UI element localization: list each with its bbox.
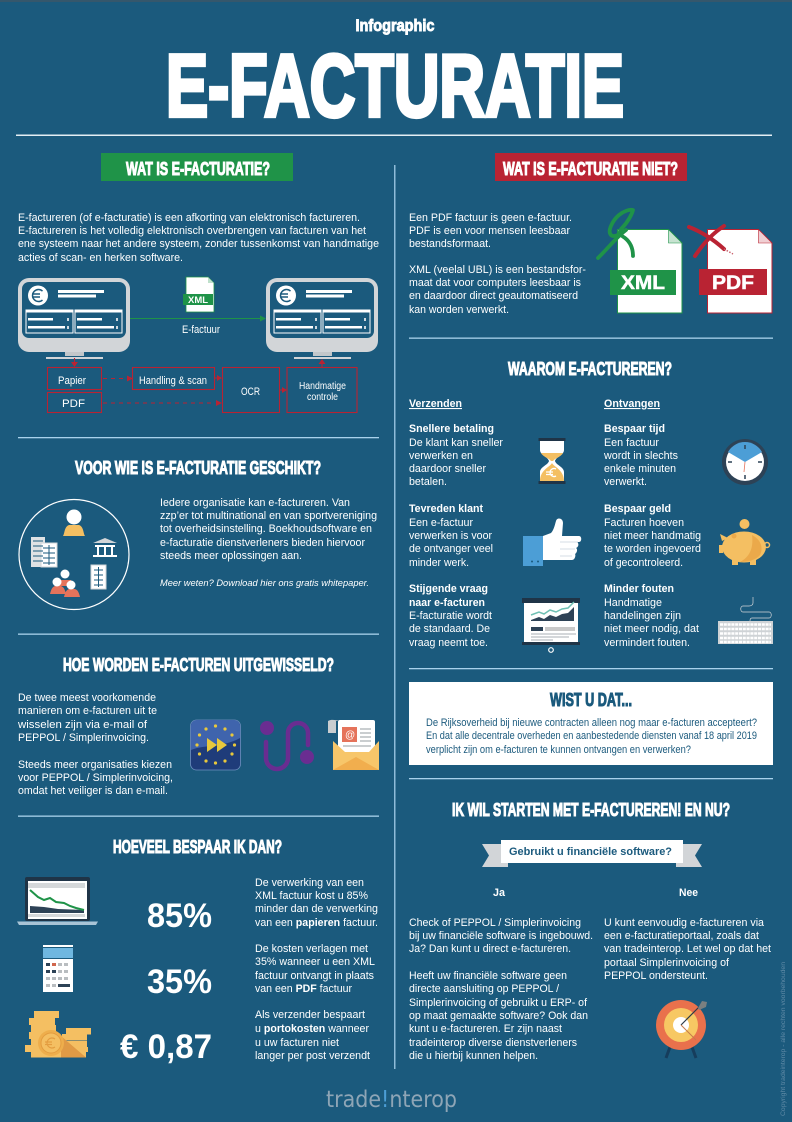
column: ontvangen: Minder fouten xyxy=(604,583,674,595)
text block: 35 percent: De kosten verlagen met xyxy=(255,943,368,955)
stat: 0,87 euro: € 0,87 xyxy=(120,1028,212,1066)
text block: 85 percent xyxy=(255,877,378,929)
title: Infographic xyxy=(356,17,434,35)
text block: voor iedereen: zzp’er tot multinational en van sportvereniging xyxy=(160,510,377,522)
panel: voor wie xyxy=(19,458,377,610)
column: ja: directe aansluiting op PEPPOL / xyxy=(409,983,560,995)
icon: xml document approved xyxy=(598,210,682,313)
column: verzenden: De klant kan sneller xyxy=(409,437,503,449)
column: verzenden: verwerken en xyxy=(409,450,473,462)
title: E-FACTURATIE xyxy=(166,36,624,135)
panel: ik wil starten xyxy=(409,800,771,1062)
text block: 85 percent: minder dan de verwerking xyxy=(255,903,378,915)
icon: piggy bank xyxy=(719,519,770,565)
column: nee xyxy=(604,887,771,982)
title xyxy=(166,17,624,135)
text block: 35 percent: factuur ontvangt in plaats xyxy=(255,970,374,982)
heading: voor wie: VOOR WIE IS E-FACTURATIE GESCHIKT? xyxy=(75,458,321,478)
icon: sender monitor xyxy=(18,278,130,359)
text block: pdf and xml: PDF is een voor mensen leesbaar xyxy=(409,225,570,237)
text block: manieren: voor PEPPOL / Simplerinvoicing, xyxy=(18,772,173,784)
column: verzenden xyxy=(409,398,503,649)
panel: wist u dat: WIST U DAT... xyxy=(550,690,632,710)
text block: pdf and xml: kan worden verwerkt. xyxy=(409,304,509,316)
panel: wist u dat xyxy=(409,682,773,765)
text block: definition: E-factureren (of e-facturatie) is een afkorting van elektronisch factureren. xyxy=(18,212,360,224)
text block: voor iedereen: Iedere organisatie kan e-factureren. Van xyxy=(160,497,350,509)
icon: peppol xyxy=(190,720,240,770)
column: nee: PEPPOL ondersteunt. xyxy=(604,970,708,982)
column: verzenden: E-facturatie wordt xyxy=(409,610,492,622)
column: ontvangen: verwerkt. xyxy=(604,476,647,488)
text block: 35 percent xyxy=(255,943,375,995)
heading: wat is e-facturatie: WAT IS E-FACTURATIE? xyxy=(126,159,270,179)
column: ja xyxy=(409,887,593,1062)
column: ja: kunt u e-factureren. Er zijn naast xyxy=(409,1023,562,1035)
column: ontvangen: te worden ingevoerd xyxy=(604,543,701,555)
icon: target xyxy=(656,1000,707,1058)
text block: pdf and xml: Een PDF factuur is geen e-factuur. xyxy=(409,212,572,224)
icon: calculator xyxy=(43,945,73,992)
column: verzenden: Een e-factuur xyxy=(409,517,473,529)
text block: manieren: omdat het veiliger is dan e-mail. xyxy=(18,785,168,797)
column: ja: op maat gemaakte software? Ook dan xyxy=(409,1010,588,1022)
text block: definition xyxy=(18,212,379,264)
text block: pdf and xml xyxy=(409,212,586,316)
text block: porto: u uw facturen niet xyxy=(255,1037,339,1049)
column: verzenden: naar e-facturen xyxy=(409,597,485,609)
text block: 85 percent: De verwerking van een xyxy=(255,877,364,889)
column: verzenden: daardoor sneller xyxy=(409,463,486,475)
column: ja: die u hierbij kunnen helpen. xyxy=(409,1050,538,1062)
column: verzenden: Verzenden xyxy=(409,398,462,410)
stat: 85 percent: 85% xyxy=(147,897,212,935)
text block: definition: acties of scan- en herken software. xyxy=(18,252,183,264)
column: ja: Heeft uw financiële software geen xyxy=(409,970,567,982)
flow: manual process xyxy=(48,358,357,412)
icon: hourglass xyxy=(538,438,566,484)
text block: voor iedereen: e-facturatie dienstverleners bieden hiervoor xyxy=(160,537,365,549)
text block: porto: u portokosten wanneer xyxy=(255,1023,369,1035)
column: ja: Check of PEPPOL / Simplerinvoicing xyxy=(409,917,581,929)
panel: hoe uitgewisseld xyxy=(17,655,379,797)
text block: definition: E-factureren is het volledig elektronisch overbrengen van facturen van het xyxy=(18,225,366,237)
flow: manual process: PDF xyxy=(62,398,85,410)
column: ja: Ja? Dan kunt u direct e-factureren. xyxy=(409,943,571,955)
icon: presentation chart xyxy=(522,598,580,652)
text block: voor iedereen: steeds meer oplossingen aan. xyxy=(160,550,302,562)
text block: manieren: wisselen zijn via e-mail of xyxy=(17,719,148,731)
text block: pdf and xml: en daardoor direct geautomatiseerd xyxy=(409,290,578,302)
icon: email envelope: @ xyxy=(345,730,355,741)
text block: manieren xyxy=(17,692,173,797)
flow: manual process: controle xyxy=(307,392,338,403)
stat: 35 percent: 35% xyxy=(147,963,212,1001)
column: verzenden: Snellere betaling xyxy=(409,423,494,435)
column: nee: portaal Simplerinvoicing of xyxy=(604,957,730,969)
column: ontvangen: handelingen zijn xyxy=(604,610,681,622)
heading: waarom e-factureren: WAAROM E-FACTUREREN? xyxy=(508,359,672,379)
icon: thumbs up xyxy=(523,519,581,566)
arrow: e-factuur: E-factuur xyxy=(182,324,220,336)
column: ja: Ja xyxy=(493,887,506,899)
column: nee: Nee xyxy=(679,887,698,899)
icon: coins xyxy=(25,1011,91,1058)
text block: pdf and xml: maat dat voor computers leesbaar is xyxy=(409,277,581,289)
icon: keyboard xyxy=(718,597,773,644)
icon: receiver monitor xyxy=(266,278,378,359)
column: ontvangen: Ontvangen xyxy=(604,398,660,410)
icon: pdf document rejected xyxy=(689,226,772,313)
column: verzenden: minder werk. xyxy=(409,557,469,569)
text block: manieren: PEPPOL / Simplerinvoicing. xyxy=(18,732,149,744)
text block: pdf and xml: XML (veelal UBL) is een bestandsfor- xyxy=(409,264,586,276)
arrow: e-factuur xyxy=(130,316,266,336)
column: ontvangen: Bespaar geld xyxy=(604,503,671,515)
icon: simplerinvoicing xyxy=(260,721,314,769)
column: verzenden: Tevreden klant xyxy=(409,503,483,515)
logo: tradeinterop: trade!nterop xyxy=(326,1087,457,1113)
text block: porto xyxy=(255,1009,370,1062)
column: verzenden: de standaard. De xyxy=(409,623,490,635)
icon: pdf document rejected: PDF xyxy=(712,273,754,294)
ribbon: question xyxy=(482,840,702,867)
panel: wat is e-facturatie xyxy=(18,153,379,412)
column: verzenden: verwerken is voor xyxy=(409,530,492,542)
text block: porto: Als verzender bespaart xyxy=(255,1009,365,1021)
text block: voor iedereen: Meer weten? Download hier ons gratis whitepaper. xyxy=(160,578,369,589)
column: ontvangen xyxy=(603,398,701,649)
column: verzenden: vraag neemt toe. xyxy=(409,637,488,649)
column: ontvangen: Handmatige xyxy=(604,597,662,609)
panel: wat is e-facturatie niet xyxy=(409,153,772,316)
text block: 85 percent: XML factuur kost u 85% xyxy=(255,890,368,902)
panel: hoeveel bespaar ik xyxy=(17,837,378,1066)
heading: wat is e-facturatie xyxy=(101,153,293,181)
icon: laptop chart xyxy=(17,877,98,925)
column: ja: bij uw financiële software is ingebouwd. xyxy=(409,930,593,942)
flow: manual process: OCR xyxy=(241,386,260,398)
text block: manieren: Steeds meer organisaties kiezen xyxy=(18,759,172,771)
column: ontvangen: vermindert fouten. xyxy=(604,637,690,649)
column: ontvangen: Een factuur xyxy=(604,437,659,449)
heading: wat is e-facturatie niet: WAT IS E-FACTURATIE NIET? xyxy=(503,159,678,179)
column: ontvangen: Bespaar tijd xyxy=(604,423,665,435)
column: ja: tradeinterop diverse dienstverleners xyxy=(409,1037,577,1049)
panel: wist u dat: verplicht zijn om e-facturen te kunnen ontvangen en verwerken? xyxy=(426,744,691,756)
text block: definition: ene systeem naar het andere systeem, zonder tussenkomst van handmatige xyxy=(18,238,379,250)
icon: xml document approved: XML xyxy=(621,273,665,294)
heading: hoe uitgewisseld: HOE WORDEN E-FACTUREN UITGEWISSELD? xyxy=(63,655,334,675)
flow: manual process: Handling & scan xyxy=(139,375,207,387)
column: ontvangen: Facturen hoeven xyxy=(604,517,684,529)
text block: 85 percent: van een papieren factuur. xyxy=(255,917,378,929)
flow: manual process: Handmatige xyxy=(299,381,346,392)
ribbon: question: Gebruikt u financiële software? xyxy=(509,846,672,858)
column: verzenden: de ontvanger veel xyxy=(409,543,493,555)
column: ontvangen: niet meer handmatig xyxy=(604,530,701,542)
column: ontvangen: niet meer nodig, dat xyxy=(604,623,699,635)
copyright note: Copyright tradeinterop - alle rechten voorbehouden xyxy=(780,962,787,1116)
column: nee: U kunt eenvoudig e-factureren via xyxy=(604,917,765,929)
column: ontvangen: of gecontroleerd. xyxy=(604,557,683,569)
text block: manieren: De twee meest voorkomende xyxy=(18,692,156,704)
column: nee: van tradeinterop. Let wel op dat het xyxy=(604,943,771,955)
text block: 35 percent: van een PDF factuur xyxy=(255,983,352,995)
text block: voor iedereen: tot overheidsinstelling. Boekhoudsoftware en xyxy=(160,523,372,535)
column: ja: Simplerinvoicing of gebruikt u ERP- of xyxy=(409,997,588,1009)
text block: voor iedereen xyxy=(160,497,377,589)
column: ontvangen: wordt in slechts xyxy=(603,450,678,462)
heading: wat is e-facturatie niet xyxy=(495,153,687,181)
heading: hoeveel bespaar: HOEVEEL BESPAAR IK DAN? xyxy=(113,837,282,857)
icon: clock xyxy=(722,439,768,485)
text block: manieren: manieren om e-facturen uit te xyxy=(18,705,157,717)
panel: waarom e-factureren xyxy=(409,359,773,652)
text block: porto: langer per post verzendt xyxy=(255,1050,370,1062)
text block: 35 percent: 35% wanneer u een XML xyxy=(255,956,375,968)
column: verzenden: betalen. xyxy=(409,476,447,488)
icon: circle of organisations xyxy=(19,500,129,610)
text block: pdf and xml: bestandsformaat. xyxy=(409,238,491,250)
column: verzenden: Stijgende vraag xyxy=(409,583,488,595)
column: ontvangen: enkele minuten xyxy=(604,463,676,475)
icon: xml file: XML xyxy=(188,295,209,305)
icon: email envelope xyxy=(328,720,379,770)
icon: xml file xyxy=(183,277,214,312)
column: nee: een e-facturatieportaal, zoals dat xyxy=(604,930,759,942)
flow: manual process: Papier xyxy=(58,375,86,387)
